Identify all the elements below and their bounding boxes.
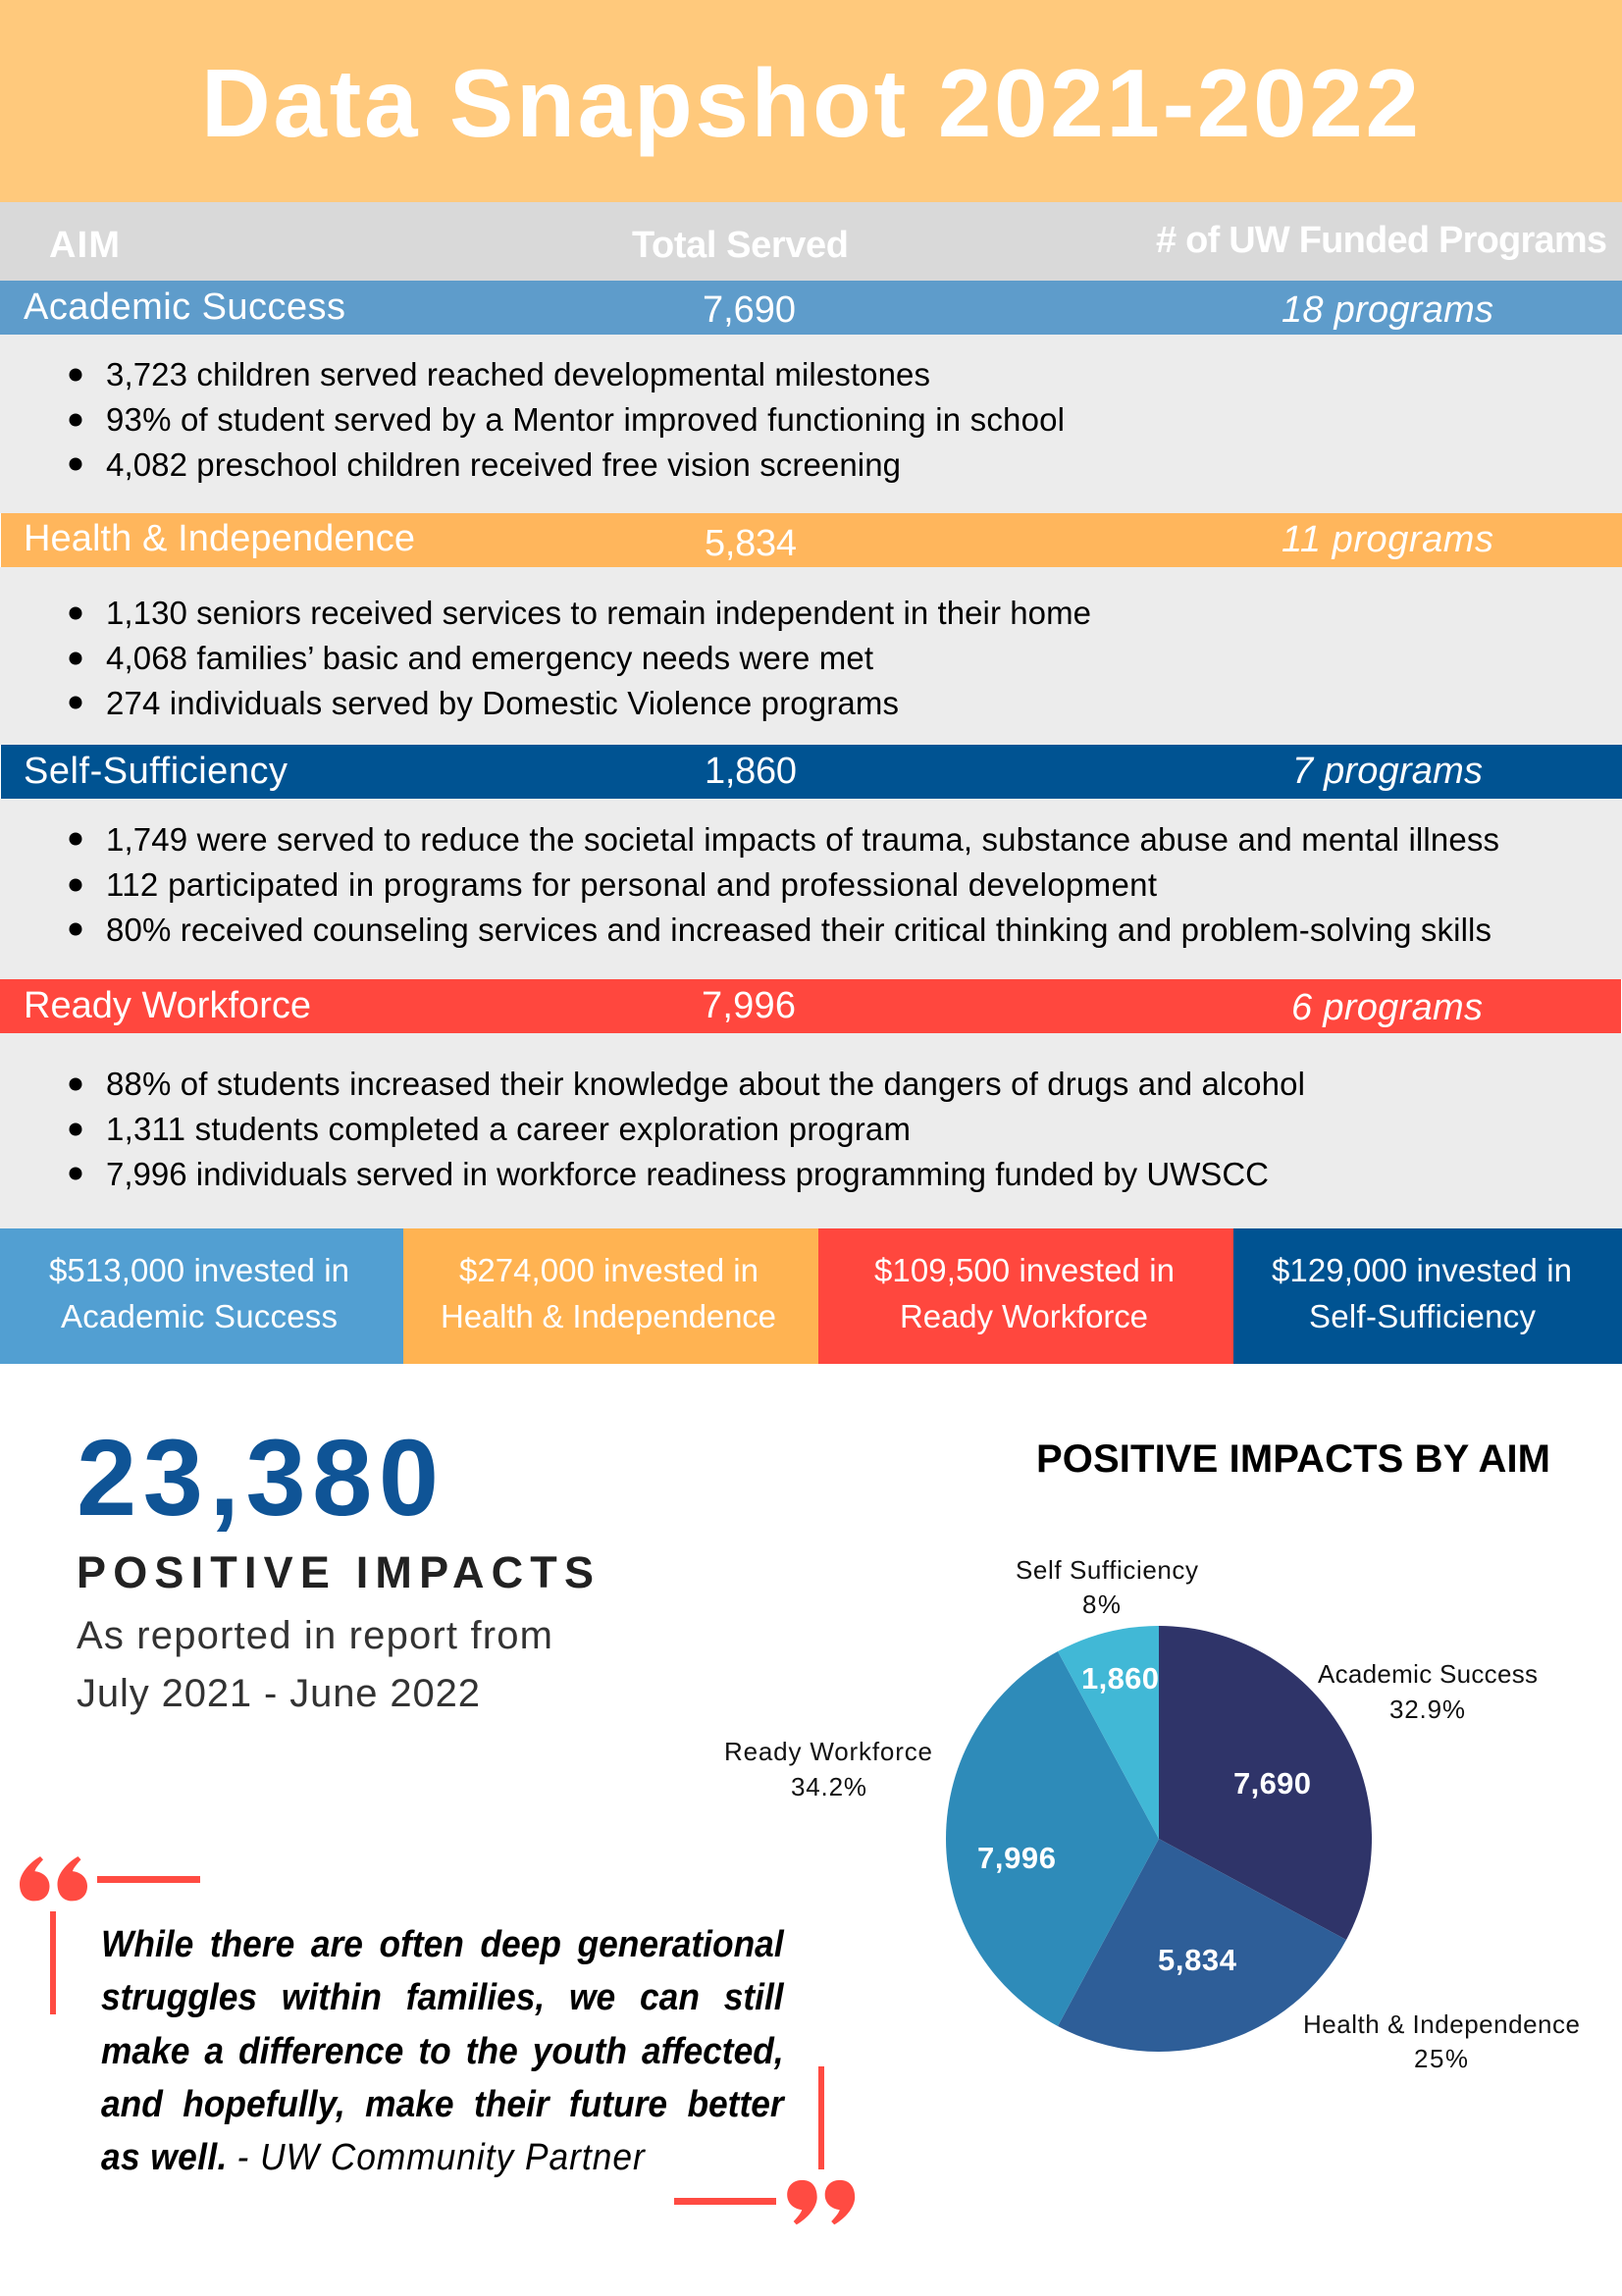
bullet list: academic success: 4,082 preschool children received free vision screening [106,446,901,483]
bullet list: self-sufficiency: 112 participated in programs for personal and professional development [106,866,1157,903]
panel: self-sufficiency: 1,860 [705,751,797,792]
bullet list: health and independence: 1,130 seniors received services to remain independent in their home [106,595,1091,631]
quote text: While there are often deep generational [101,1924,784,1965]
table column headings: AIM [49,225,120,266]
panel: academic success: Academic Success [24,287,345,328]
pie label: ready workforce [724,1737,932,1801]
table column headings: Total Served [632,225,849,266]
bullet list: self-sufficiency: 1,749 were served to reduce the societal impacts of trauma, substance abuse and mental illness [106,821,1499,858]
panel: health and independence: Health & Independence [24,518,415,559]
pie chart: positive impacts by aim: 7,996 [977,1841,1056,1875]
investment tile: academic success: $513,000 invested in [49,1252,349,1288]
investment tile: academic success [0,1228,403,1364]
reporting period [77,1614,552,1715]
bullet list: self-sufficiency: 80% received counseling services and increased their critical thinking and problem-solving skills [106,912,1491,948]
pie label: self sufficiency: 8% [1082,1590,1121,1619]
pie label: health and independence: Health & Independence [1303,2009,1580,2039]
quote text: make a difference to the youth affected, [101,2031,784,2072]
bullet list: ready workforce: 88% of students increased their knowledge about the dangers of drugs and alcohol [106,1066,1305,1102]
big number: positive impacts: 23,380 [77,1418,439,1539]
pie label: health and independence [1303,2009,1580,2073]
investment tile: health and independence: Health & Independence [441,1298,776,1334]
investment tile: ready workforce [818,1228,1233,1364]
quote text [101,1924,785,2178]
pie label: ready workforce: 34.2% [791,1772,866,1801]
panel: ready workforce [0,979,1622,1228]
chart title: POSITIVE IMPACTS BY AIM [1036,1437,1550,1481]
bullet list: health and independence: 274 individuals served by Domestic Violence programs [106,685,899,721]
pie chart: positive impacts by aim: 7,690 [1233,1766,1311,1800]
pie label: academic success: 32.9% [1389,1695,1465,1724]
pie label: self sufficiency [1016,1555,1198,1619]
panel: academic success: 7,690 [703,289,796,331]
investment tile: health and independence: $274,000 invested in [459,1252,759,1288]
panel: academic success [0,281,1622,513]
title: Data Snapshot 2021-2022 [201,49,1419,157]
investment tile: self-sufficiency: $129,000 invested in [1272,1252,1572,1288]
quote text: and hopefully, make their future better [101,2084,784,2125]
panel: academic success: 18 programs [1282,289,1493,331]
panel: health and independence: 11 programs [1282,519,1493,560]
bullet list: ready workforce: 7,996 individuals served in workforce readiness programming funded by UWSCC [106,1156,1269,1192]
pie label: academic success [1318,1659,1538,1724]
panel: health and independence: 5,834 [705,523,797,564]
bullet list: health and independence: 4,068 families’ basic and emergency needs were met [106,640,873,676]
icon: opening quotation mark with rules [20,1856,200,2014]
pie label: academic success: Academic Success [1318,1659,1538,1689]
pie label: health and independence: 25% [1414,2044,1468,2073]
panel: ready workforce: 6 programs [1291,987,1483,1028]
panel: self-sufficiency: Self-Sufficiency [24,751,288,792]
quote text: struggles within families, we can still [101,1977,784,2018]
positive impacts label: POSITIVE IMPACTS [77,1547,594,1597]
investment tile: self-sufficiency: Self-Sufficiency [1309,1298,1537,1334]
icon: closing quotation mark with rules [674,2066,855,2224]
bullet list: ready workforce: 1,311 students completed a career exploration program [106,1111,911,1147]
panel: health and independence [0,513,1622,745]
pie chart: positive impacts by aim: 1,860 [1081,1661,1159,1696]
reporting period: July 2021 - June 2022 [77,1672,480,1715]
bullet list: ready workforce [69,1066,1305,1192]
table column headings: # of UW Funded Programs [1156,220,1607,261]
panel: ready workforce: 7,996 [702,985,796,1026]
investment tile: self-sufficiency [1233,1228,1622,1364]
pie chart: positive impacts by aim [946,1626,1372,2052]
panel: ready workforce: Ready Workforce [24,985,311,1026]
bullet list: academic success [69,356,1065,483]
pie label: self sufficiency: Self Sufficiency [1016,1555,1198,1585]
bullet list: academic success: 3,723 children served reached developmental milestones [106,356,930,392]
pie chart: positive impacts by aim: 5,834 [1158,1943,1237,1977]
reporting period: As reported in report from [77,1614,552,1657]
panel: self-sufficiency [0,745,1622,979]
bullet list: academic success: 93% of student served by a Mentor improved functioning in school [106,401,1065,438]
investment tile: ready workforce: $109,500 invested in [874,1252,1175,1288]
bullet list: health and independence [69,595,1091,721]
pie label: ready workforce: Ready Workforce [724,1737,932,1766]
investment tile: academic success: Academic Success [61,1298,338,1334]
header banner [0,0,1622,202]
bullet list: self-sufficiency [69,821,1499,948]
panel: self-sufficiency: 7 programs [1292,751,1483,792]
investment tile: health and independence [403,1228,818,1364]
table column headings [0,202,1622,281]
quote text: as well. - UW Community Partner [101,2137,646,2178]
investment tile: ready workforce: Ready Workforce [900,1298,1148,1334]
